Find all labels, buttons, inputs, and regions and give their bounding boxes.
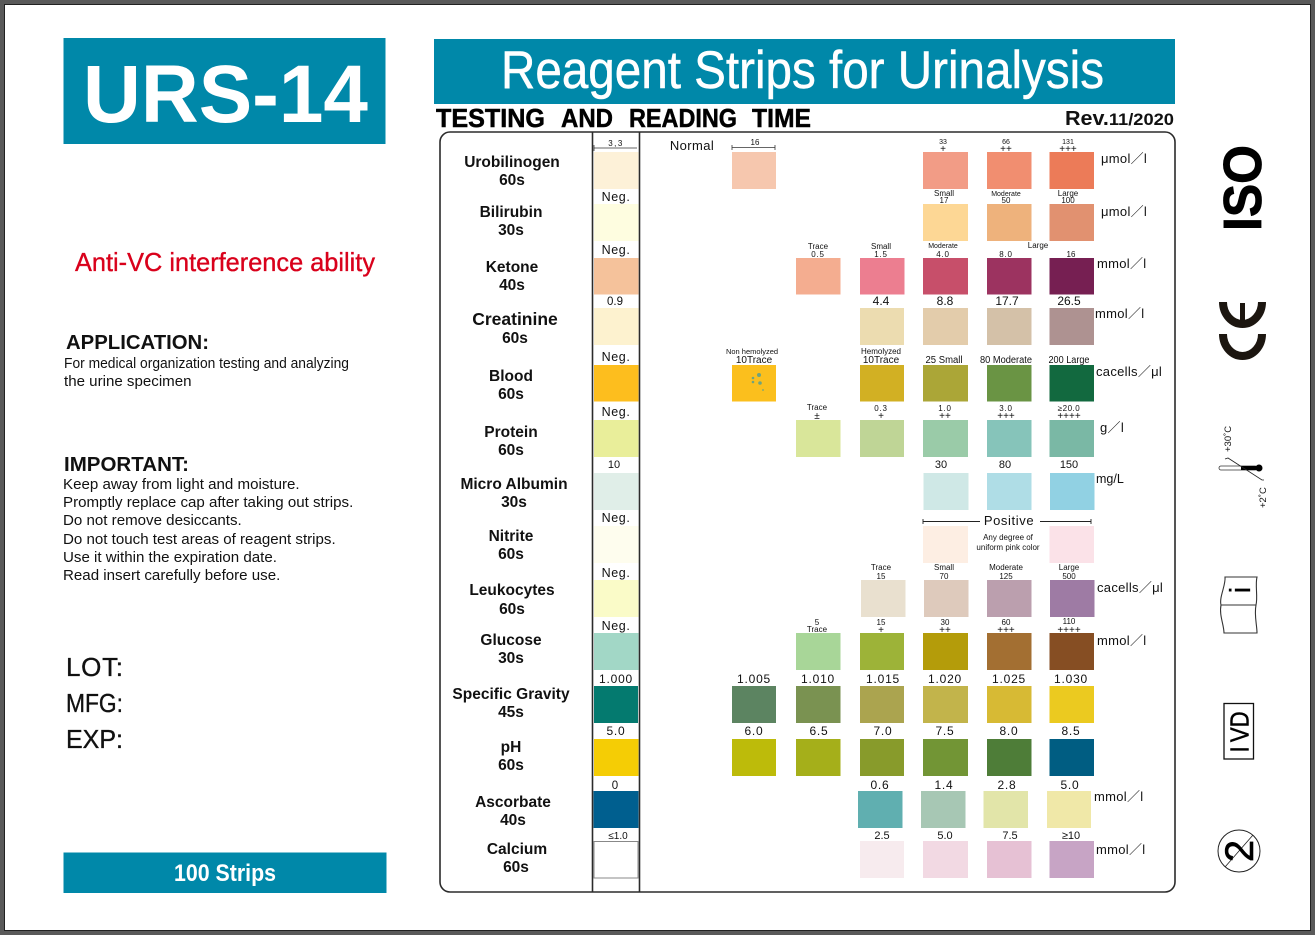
row: urobilinogen: 16 — [751, 138, 760, 147]
row: bilirubin: Neg. — [602, 190, 630, 204]
row: specific gravity: 1.000 — [599, 672, 633, 686]
row: leukocytes: Moderate — [989, 563, 1023, 572]
text block: important: Do not touch test areas of reagent strips. — [63, 531, 336, 548]
row: bilirubin: Small — [934, 189, 954, 198]
section heading: AND — [561, 103, 613, 133]
row: calcium: 2.5 — [874, 830, 890, 842]
row: glucose: Neg. — [602, 619, 630, 633]
revision label: Rev.11/2020 — [1065, 108, 1174, 130]
row: pH: 8.5 — [1061, 724, 1081, 738]
row: ketone: 8.0 — [999, 250, 1013, 259]
icon: instructions booklet: i — [1225, 587, 1257, 593]
row: ascorbate: 0.6 — [870, 778, 890, 792]
row: leukocytes: 15 — [877, 572, 886, 581]
row: micro albumin: mg/L — [1096, 472, 1124, 486]
text block: lot, mfg, exp: MFG: — [66, 688, 123, 718]
row: bilirubin: μmol／l — [1101, 204, 1147, 219]
row: creatinine: 60s — [502, 330, 528, 347]
row: creatinine: 0.9 — [607, 296, 623, 308]
row: ketone: 40s — [499, 277, 525, 294]
row: micro albumin: Micro Albumin — [460, 476, 568, 493]
row: pH: 6.0 — [744, 724, 764, 738]
row: nitrite: Neg. — [602, 511, 630, 525]
row: nitrite: 60s — [498, 546, 524, 563]
row: creatinine: 4.4 — [873, 294, 890, 308]
row: bilirubin: Moderate — [991, 191, 1021, 198]
row: blood: Non hemolyzed — [726, 347, 778, 356]
row: ketone: Trace — [808, 242, 829, 251]
row: specific gravity: Specific Gravity — [452, 686, 570, 703]
row: nitrite: Any degree of — [983, 533, 1034, 542]
row: ascorbate: 40s — [500, 812, 526, 829]
row: specific gravity: 1.025 — [992, 672, 1026, 686]
row: ascorbate: Ascorbate — [475, 794, 551, 811]
row: pH: pH — [501, 739, 521, 756]
row: urobilinogen: μmol／l — [1101, 151, 1147, 166]
row: calcium: Calcium — [487, 841, 547, 858]
row: creatinine: Creatinine — [472, 309, 558, 329]
row: ascorbate: 2.8 — [997, 778, 1017, 792]
row: protein: ± — [814, 411, 820, 422]
icon: IVD: IVD — [1226, 711, 1255, 752]
row: leukocytes: 125 — [999, 572, 1013, 581]
row: protein: g／l — [1100, 420, 1124, 435]
icon: storage temperature: +2˚C — [1258, 487, 1269, 508]
row: urobilinogen: 60s — [499, 172, 525, 189]
row: pH: 7.5 — [935, 724, 955, 738]
row: glucose: Glucose — [480, 632, 542, 649]
pack size banner — [64, 852, 386, 893]
row: ketone: Ketone — [486, 259, 539, 276]
panel: colour chart — [440, 132, 1175, 892]
section heading — [436, 103, 811, 133]
row: pH: 7.0 — [873, 724, 893, 738]
row: urobilinogen: 66 — [1002, 139, 1010, 146]
row: bilirubin: 100 — [1061, 196, 1075, 205]
row: micro albumin: 30 — [935, 459, 947, 471]
icon: instructions booklet — [1221, 577, 1257, 633]
row: leukocytes: Leukocytes — [469, 582, 555, 599]
row: ascorbate: 0 — [612, 780, 618, 792]
row: glucose: mmol／l — [1097, 633, 1146, 648]
row: nitrite: Nitrite — [489, 528, 534, 545]
row: glucose: 30s — [498, 650, 524, 667]
row: protein: ++++ — [1057, 411, 1081, 422]
row: urobilinogen: Urobilinogen — [464, 154, 560, 171]
row: protein: ≥20.0 — [1058, 404, 1080, 413]
text block: important — [63, 454, 353, 584]
row: bilirubin: 50 — [1002, 196, 1011, 205]
row: leukocytes: 70 — [940, 572, 949, 581]
text block: lot, mfg, exp: LOT: — [66, 652, 123, 682]
icon: storage temperature — [1219, 426, 1269, 508]
row: blood: Neg. — [602, 350, 630, 364]
row: leukocytes — [469, 563, 1163, 618]
chart frame — [440, 132, 1175, 892]
text block: application: the urine specimen — [64, 373, 192, 390]
row: urobilinogen: ++ — [1000, 144, 1012, 155]
row: creatinine — [472, 294, 1144, 347]
row: protein: Protein — [484, 424, 538, 441]
text block: lot, mfg, exp: EXP: — [66, 724, 123, 754]
row: creatinine: 26.5 — [1057, 294, 1081, 308]
icon: storage temperature: +30˚C — [1223, 426, 1234, 452]
row: glucose: + — [878, 625, 884, 636]
row: specific gravity: 1.005 — [737, 672, 771, 686]
icon: hemolyzed spots — [752, 373, 764, 391]
row: calcium: mmol／l — [1096, 842, 1145, 857]
row: ketone: 16 — [1067, 250, 1076, 259]
row: urobilinogen — [464, 138, 1147, 189]
section heading: TESTING — [436, 103, 545, 133]
row: leukocytes: cacells／μl — [1097, 580, 1163, 595]
strip column rules — [592, 132, 640, 892]
title banner: Reagent Strips for Urinalysis — [501, 41, 1104, 100]
row: glucose: 15 — [877, 618, 886, 627]
text block: important: Use it within the expiration date. — [63, 549, 277, 566]
row: ascorbate: 5.0 — [1060, 778, 1080, 792]
row: creatinine: 8.8 — [937, 294, 954, 308]
row: urobilinogen: 33 — [939, 139, 947, 146]
row: urobilinogen: + — [940, 144, 946, 155]
text block: important: Read insert carefully before use. — [63, 567, 280, 584]
row: micro albumin: 150 — [1060, 459, 1078, 471]
callout: anti-VC: Anti-VC interference ability — [75, 247, 375, 277]
row: blood: 25 Small — [926, 355, 962, 366]
row: micro albumin: 10 — [608, 459, 620, 471]
row: leukocytes: Trace — [871, 563, 892, 572]
row: leukocytes: 60s — [499, 601, 525, 618]
row: pH: 6.5 — [809, 724, 829, 738]
section heading: READING — [629, 103, 737, 133]
row: protein: 0.3 — [874, 404, 888, 413]
text block: application: APPLICATION: — [66, 332, 209, 354]
row: blood: Hemolyzed — [861, 347, 901, 356]
row: specific gravity: 45s — [498, 704, 524, 721]
row: glucose: 60 — [1002, 618, 1011, 627]
icon: do not reuse: 2 — [1218, 840, 1262, 862]
row: pH: 8.0 — [999, 724, 1019, 738]
text block: important: IMPORTANT: — [64, 454, 189, 476]
row: micro albumin: 30s — [501, 494, 527, 511]
row: protein — [484, 403, 1124, 459]
text block: important: Promptly replace cap after taking out strips. — [63, 494, 353, 511]
row: protein: Trace — [807, 403, 828, 412]
row: protein: +++ — [997, 411, 1015, 422]
text block: application: For medical organization testing and analyzing — [64, 355, 349, 372]
row: specific gravity: 1.030 — [1054, 672, 1088, 686]
row: glucose: 110 — [1063, 617, 1076, 626]
row: urobilinogen: Normal — [670, 138, 714, 153]
row: glucose: 5 — [815, 618, 820, 627]
row: bilirubin: Large — [1058, 189, 1079, 198]
pack size banner: 100 Strips — [174, 860, 276, 887]
row: calcium: 7.5 — [1002, 830, 1018, 842]
row: protein: 3.0 — [999, 404, 1013, 413]
text block: important: Do not remove desiccants. — [63, 512, 242, 529]
row: pH: 5.0 — [606, 724, 626, 738]
row: pH — [498, 724, 1094, 776]
row: ketone: 0.5 — [811, 250, 825, 259]
row: protein: + — [878, 411, 884, 422]
row: blood: Blood — [489, 368, 533, 385]
row: ascorbate: mmol／l — [1094, 789, 1143, 804]
row: protein: Neg. — [602, 405, 630, 419]
row: blood — [489, 347, 1162, 403]
row: ascorbate — [475, 778, 1143, 829]
text block: application — [64, 332, 349, 390]
row: glucose: ++ — [939, 625, 951, 636]
row: ketone: Large — [1028, 241, 1049, 250]
row: ascorbate: 1.4 — [934, 778, 954, 792]
row: leukocytes: Neg. — [602, 566, 630, 580]
row: bilirubin — [480, 189, 1147, 241]
text block: lot, mfg, exp — [66, 652, 123, 754]
row: urobilinogen: 131 — [1062, 139, 1074, 146]
row: calcium — [487, 830, 1145, 878]
row: nitrite: Positive — [984, 513, 1034, 528]
row: protein: 1.0 — [938, 404, 952, 413]
row: specific gravity — [452, 672, 1094, 723]
row: glucose: Trace — [807, 625, 828, 634]
row: calcium: 60s — [503, 859, 529, 876]
row: micro albumin — [460, 459, 1124, 511]
row: specific gravity: 1.020 — [928, 672, 962, 686]
row: pH: 60s — [498, 757, 524, 774]
row: protein: 60s — [498, 442, 524, 459]
row: urobilinogen: +++ — [1059, 144, 1077, 155]
row: leukocytes: 500 — [1062, 572, 1076, 581]
section heading: TIME — [752, 103, 811, 133]
row: nitrite: uniform pink color — [976, 543, 1040, 552]
icon: IVD — [1224, 704, 1255, 759]
row: bilirubin: 17 — [940, 196, 949, 205]
row: blood: 60s — [498, 386, 524, 403]
row: ketone — [486, 241, 1146, 294]
row: calcium: ≤1.0 — [608, 831, 628, 842]
icon: ISO: ISO — [1213, 145, 1273, 231]
row: blood: 200 Large — [1048, 355, 1090, 366]
row: ketone: Neg. — [602, 243, 630, 257]
row: blood: 10Trace — [863, 355, 900, 366]
row: calcium: ≥10 — [1062, 830, 1080, 842]
icon: CE mark — [1223, 302, 1262, 356]
row: ketone: Moderate — [928, 243, 958, 250]
row: nitrite — [489, 511, 1094, 563]
row: ketone: Small — [871, 242, 891, 251]
row: micro albumin: 80 — [999, 459, 1011, 471]
row: blood: cacells／μl — [1096, 364, 1162, 379]
row: ketone: mmol／l — [1097, 256, 1146, 271]
row: glucose: ++++ — [1057, 625, 1081, 636]
row: urobilinogen: 3,3 — [608, 139, 624, 148]
text block: important: Keep away from light and moisture. — [63, 476, 300, 493]
row: glucose — [480, 617, 1146, 670]
row: blood: 80 Moderate — [980, 355, 1032, 366]
product code banner: URS-14 — [83, 49, 368, 140]
row: ketone: 1.5 — [874, 250, 888, 259]
row: ketone: 4.0 — [936, 250, 950, 259]
row: blood: 10Trace — [736, 355, 773, 366]
row: specific gravity: 1.015 — [866, 672, 900, 686]
row: calcium: 5.0 — [937, 830, 953, 842]
row: creatinine: mmol／l — [1095, 306, 1144, 321]
icon: do not reuse — [1218, 830, 1262, 872]
row: specific gravity: 1.010 — [801, 672, 835, 686]
row: bilirubin: Bilirubin — [480, 204, 542, 221]
row: bilirubin: 30s — [498, 222, 524, 239]
row: glucose: +++ — [997, 625, 1015, 636]
row: glucose: 30 — [941, 618, 950, 627]
row: leukocytes: Small — [934, 563, 954, 572]
row: protein: ++ — [939, 411, 951, 422]
row: leukocytes: Large — [1059, 563, 1080, 572]
row: creatinine: 17.7 — [995, 294, 1019, 308]
